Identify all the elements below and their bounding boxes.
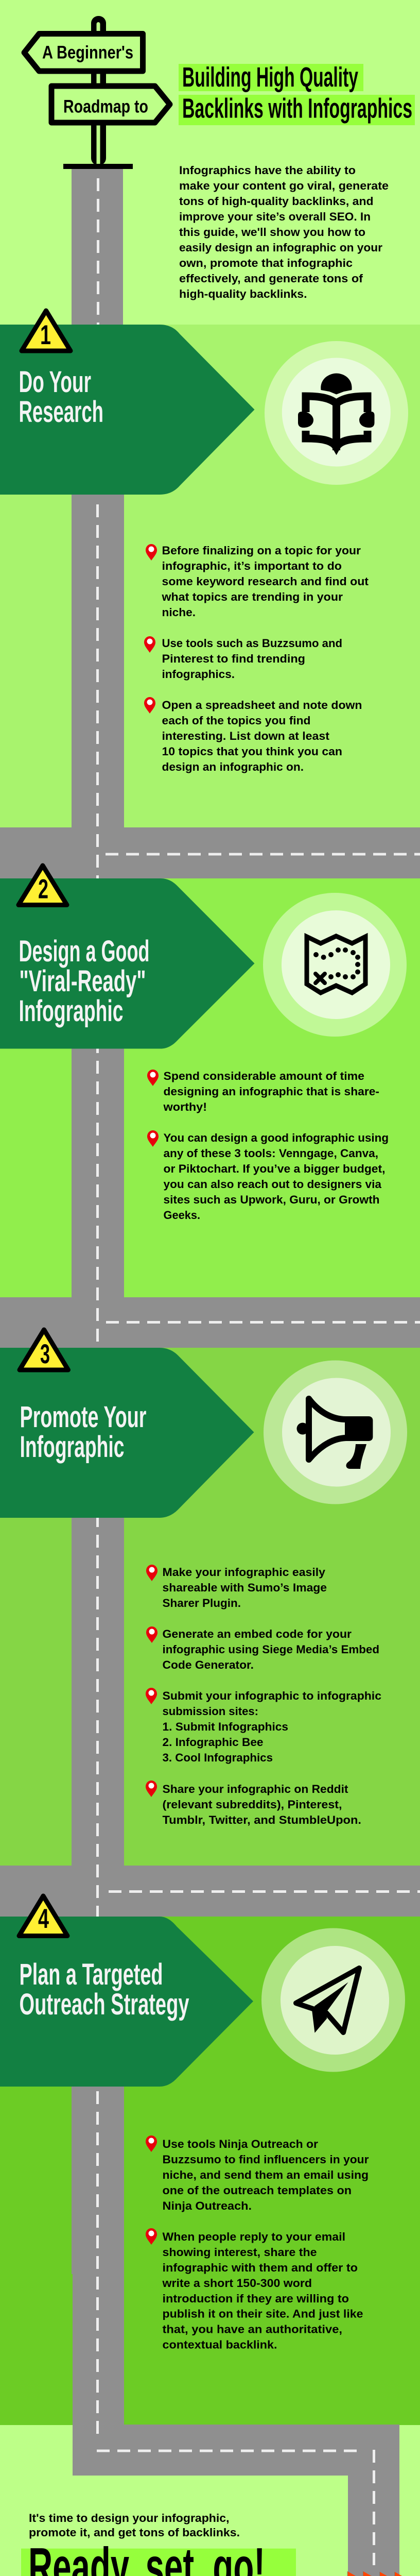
bullet: submission sites: 3. Cool Infographics — [163, 1751, 273, 1764]
bullet: design tools: you can also reach out to designers via — [164, 1178, 382, 1191]
bullet: open a spreadsheet — [144, 697, 362, 773]
closing text — [29, 2512, 240, 2539]
icon: warning sign 3 — [20, 1330, 68, 1370]
icon: finish flags — [348, 2571, 407, 2576]
intro text — [179, 164, 389, 300]
sign: A Beginner's — [24, 34, 143, 71]
bullet: finalizing a topic: some keyword research and find out — [162, 575, 369, 588]
heading: Promote Your Infographic: Infographic — [20, 1430, 125, 1464]
panel: section 2 background — [0, 878, 420, 1297]
bullet: offer introduction: write a short 150-300 word — [162, 2277, 312, 2290]
heading: Design a Good Viral-Ready Infographic — [19, 935, 149, 1028]
heading: Design a Good Viral-Ready Infographic: "Viral-Ready" — [20, 964, 146, 998]
bullet: embed code: infographic using Siege Media’s Embed — [163, 1643, 379, 1656]
panel: step 1 banner — [0, 311, 254, 495]
heading: Promote Your Infographic: Promote Your — [20, 1400, 146, 1434]
bullet: design tools: Geeks. — [164, 1209, 200, 1222]
bullet: share on social sites: Tumblr, Twitter, and StumbleUpon. — [163, 1814, 361, 1826]
bullet: offer introduction: contextual backlink. — [163, 2338, 277, 2351]
icon: warning sign 2: 2 — [38, 874, 48, 905]
intro text: high-quality backlinks. — [179, 287, 307, 300]
bullet: image sharer plugin: shareable with Sumo’s Image — [163, 1581, 327, 1594]
bullet: embed code — [146, 1626, 379, 1671]
heading: Promote Your Infographic — [20, 1400, 146, 1464]
closing text: It's time to design your infographic, — [29, 2512, 230, 2524]
panel: section 3 background — [0, 1348, 420, 1866]
icon: map pin — [146, 2136, 157, 2152]
bullet: offer introduction: that, you have an authoritative, — [163, 2323, 342, 2336]
panel: section 4 background — [0, 1917, 420, 2425]
bullet: submission sites — [146, 1688, 381, 1764]
panel: section 1 background — [0, 325, 420, 827]
icon: map pin — [147, 1130, 159, 1147]
bullet: design time: worthy! — [163, 1100, 207, 1113]
icon: warning sign 4 — [19, 1896, 67, 1936]
icon: warning sign 3: 3 — [40, 1339, 50, 1369]
bullet: offer introduction: infographic with them and offer to — [163, 2261, 358, 2274]
bullet: finalizing a topic — [146, 544, 369, 619]
icon: map pin — [146, 2228, 157, 2245]
bullet: design tools — [147, 1130, 389, 1222]
title — [179, 62, 415, 125]
icon: map pin — [146, 1781, 157, 1797]
intro text: improve your site’s overall SEO. In — [179, 210, 371, 223]
bullet: submission sites: submission sites: — [163, 1705, 258, 1718]
bullet: image sharer plugin: Sharer Plugin. — [163, 1597, 241, 1609]
intro text: this guide, we'll show you how to — [179, 226, 365, 239]
intro text: own, promote that infographic — [179, 257, 353, 269]
bullet: open a spreadsheet: 10 topics that you think you can — [162, 745, 342, 758]
icon: map pin — [144, 697, 155, 714]
bullet: submission sites: 1. Submit Infographics — [163, 1720, 288, 1733]
intro text: make your content go viral, generate — [179, 179, 389, 192]
signpost with two signs — [24, 16, 170, 169]
bullet: find influencers: Ninja Outreach. — [163, 2199, 252, 2212]
icon: map pin — [146, 1565, 157, 1581]
bullet: design tools: or Piktochart. If you’ve a bigger budget, — [164, 1162, 385, 1175]
bullet: embed code: Code Generator. — [163, 1658, 254, 1671]
bullet: open a spreadsheet: Open a spreadsheet and note down — [162, 699, 362, 711]
icon: warning sign 4: 4 — [38, 1904, 49, 1934]
intro text: Infographics have the ability to — [179, 164, 356, 177]
icon: map pin — [146, 1688, 157, 1704]
bullet: submission sites: Submit your infographic to infographic — [163, 1689, 381, 1702]
bullet: share on social sites — [146, 1781, 361, 1826]
bullet: design time — [147, 1070, 379, 1113]
bullet: find influencers: Buzzsumo to find influencers in your — [163, 2153, 369, 2166]
bullet: find influencers: Use tools Ninja Outreach or — [163, 2138, 318, 2150]
panel: step 4 banner — [0, 1896, 253, 2087]
bullet: offer introduction: introduction if they are willing to — [163, 2292, 349, 2305]
road lane markings — [97, 178, 420, 2565]
bullet: offer introduction: showing interest, share the — [163, 2246, 317, 2259]
bullet: finalizing a topic: infographic, it’s important to do — [162, 560, 342, 572]
icon: paper plane — [261, 1928, 405, 2072]
bullet: find influencers — [146, 2136, 369, 2212]
bullet: find influencers: one of the outreach templates on — [163, 2184, 352, 2197]
icon: map pin — [144, 636, 155, 653]
icon: treasure map — [263, 893, 407, 1037]
bullet: Buzzsumo and Pinterest: infographics. — [162, 668, 235, 681]
bullet: finalizing a topic: what topics are trending in your — [161, 590, 343, 603]
panel: step 2 banner — [0, 866, 254, 1049]
icon: warning sign 2 — [19, 866, 67, 905]
heading: Plan a Targeted Outreach Strategy: Outreach Strategy — [20, 1988, 189, 2021]
bullet: image sharer plugin: Make your infographic easily — [163, 1566, 326, 1579]
bullet: finalizing a topic: Before finalizing on a topic for your — [162, 544, 361, 557]
bullet: open a spreadsheet: each of the topics you find — [162, 714, 311, 727]
bullet: open a spreadsheet: design an infographic on. — [162, 760, 304, 773]
heading: Plan a Targeted Outreach Strategy — [20, 1958, 189, 2021]
heading: Plan a Targeted Outreach Strategy: Plan a Targeted — [20, 1958, 163, 1991]
bullet: offer introduction: publish it on their site. And just like — [163, 2307, 363, 2320]
icon: warning sign 1: 1 — [40, 320, 51, 350]
heading: Do Your Research — [19, 365, 103, 429]
icon: map pin — [147, 1070, 159, 1086]
heading: Do Your Research: Do Your — [19, 365, 91, 399]
sign: A Beginner's: A Beginner's — [42, 43, 133, 63]
intro text: tons of high-quality backlinks, and — [179, 195, 374, 208]
icon: megaphone — [264, 1360, 407, 1504]
icon: map pin — [146, 544, 157, 561]
bullet: submission sites: 2. Infographic Bee — [163, 1736, 264, 1749]
bullet: Buzzsumo and Pinterest: Use tools such as Buzzsumo and — [162, 637, 342, 650]
bullet: design tools: You can design a good infographic using — [164, 1131, 389, 1144]
icon: warning sign 1 — [22, 311, 71, 351]
bullet: offer introduction: When people reply to your email — [163, 2230, 345, 2243]
intro text: effectively, and generate tons of — [179, 272, 363, 285]
heading: Do Your Research: Research — [19, 395, 103, 429]
heading: Design a Good Viral-Ready Infographic: Infographic — [19, 994, 124, 1028]
sign: Roadmap to: Roadmap to — [63, 97, 148, 116]
panel: step 3 banner — [0, 1330, 254, 1518]
bullet: offer introduction — [146, 2228, 363, 2351]
bullet: embed code: Generate an embed code for your — [163, 1628, 352, 1640]
bullet: open a spreadsheet: interesting. List down at least — [162, 730, 330, 742]
bullet: design time: Spend considerable amount of time — [164, 1070, 364, 1082]
bullet: design tools: any of these 3 tools: Venngage, Canva, — [164, 1147, 378, 1160]
icon: person reading book — [265, 341, 408, 485]
bullet: share on social sites: (relevant subreddits), Pinterest, — [163, 1798, 342, 1811]
bullet: design tools: sites such as Upwork, Guru, or Growth — [164, 1193, 380, 1206]
sign: Roadmap to — [51, 86, 170, 123]
bullet: Buzzsumo and Pinterest — [144, 636, 342, 681]
closing text: promote it, and get tons of backlinks. — [29, 2526, 240, 2539]
heading: Ready, set, go! — [21, 2537, 296, 2576]
bullet: image sharer plugin — [146, 1565, 327, 1609]
heading: Design a Good Viral-Ready Infographic: Design a Good — [19, 935, 149, 968]
bullet: Buzzsumo and Pinterest: Pinterest to find trending — [162, 652, 305, 665]
intro text: easily design an infographic on your — [179, 241, 382, 254]
bullet: design time: designing an infographic that is share- — [164, 1085, 379, 1098]
bullet: finalizing a topic: niche. — [162, 606, 196, 619]
icon: map pin — [146, 1626, 157, 1643]
bullet: find influencers: niche, and send them an email using — [163, 2168, 369, 2181]
bullet: share on social sites: Share your infographic on Reddit — [163, 1783, 348, 1795]
